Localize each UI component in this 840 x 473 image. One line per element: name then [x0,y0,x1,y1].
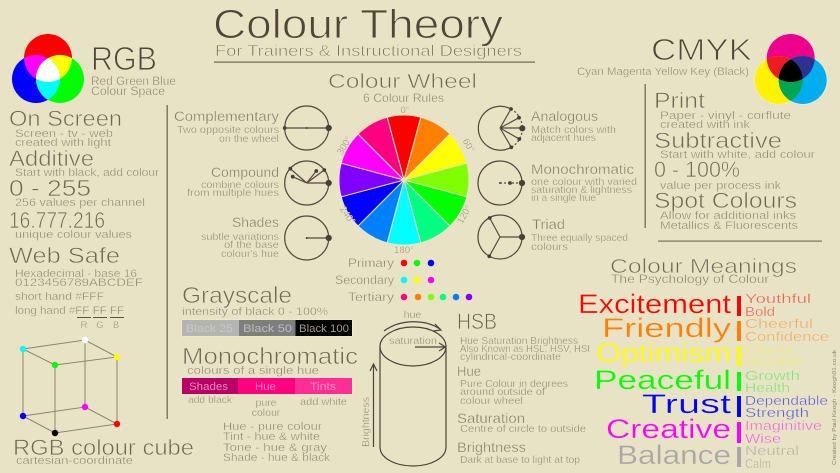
meaning: trust: Strength [745,405,809,420]
credit: Created by Paul Keogh - Keogh01.co.uk [832,350,838,465]
meaning: optimism [596,338,805,369]
rule: complementary [174,106,332,150]
meaning: balance: Calm [745,456,771,471]
panel: monochromatic [182,343,358,419]
panel: RGB facts: 0 - 255 [9,175,91,201]
panel: RGB facts: Screen - tv - web [15,128,113,140]
rule: analogous: Analogous [531,109,598,124]
text block: HSB: Brightness [457,439,526,455]
meaning: trust [642,389,828,420]
wheel degree labels: 300° [335,134,355,157]
heading: colour meanings: The Psychology of Colour [611,272,769,286]
legend: primary, secondary, tertiary: Secondary [335,275,394,287]
panel: web safe: B [113,320,119,331]
panel: web safe: Hexadecimal - base 16 [15,268,137,280]
heading: colour wheel [328,71,477,105]
divider: right column [644,84,646,228]
panel: CMYK facts: created with ink [660,119,751,131]
meaning: peaceful [594,365,800,395]
text block: HSB: cylindrical-coordinate [460,351,561,363]
panel: CMYK facts: Paper - vinyl - corflute [660,110,791,122]
heading: RGB colour cube: cartesian-coordinate [16,455,133,467]
meaning: creative [606,414,822,446]
panel: monochromatic: add white [300,396,347,408]
text block: HSB: Also Known as HSL, HSV, HSI [460,343,590,355]
rule: compound [187,161,332,205]
heading: RGB: Red Green Blue [91,76,176,88]
rule: monochromatic: one colour with varied [531,176,637,188]
text block: HSB: Centre of circle to outside [460,423,586,435]
heading: CMYK [577,32,752,78]
rule: shades: subtle variations [201,231,279,243]
chart: HSB cylinder: hue [404,309,421,321]
panel: web safe: short hand #FFF [15,291,104,303]
text block: hue definitions: Tone - hue & gray [223,442,328,454]
panel: RGB facts: 256 values per channel [15,197,145,209]
rule: triad [478,215,628,259]
rule: shades [201,215,332,260]
panel: CMYK facts: 0 - 100% [654,157,740,182]
rule: analogous: Match colors with [531,124,616,136]
rule: compound: combine colours [201,179,279,191]
wheel degree labels: 180° [394,245,414,256]
text block: hue definitions: Tint - hue & white [223,431,320,443]
rule: analogous: adjacent hues [531,132,596,144]
text block: HSB: HSB [457,309,497,334]
text block: hue definitions: Shade - hue & black [223,452,331,464]
text block: HSB: around outside of [460,386,545,398]
legend: primary, secondary, tertiary: Primary [348,258,394,270]
rule: complementary: Two opposite colours [177,124,279,136]
divider: left column [166,105,168,419]
panel: monochromatic: colour [252,407,281,419]
wheel degree labels [335,105,477,256]
meaning: balance: Balance [617,440,731,470]
panel: web safe: 0123456789ABCDEF [15,277,143,289]
heading: colour wheel: 6 Colour Rules [363,91,444,105]
heading: colour meanings [610,256,797,286]
wheel degree labels: 120° [455,203,475,226]
rule: complementary: Complementary [174,109,279,124]
rule: triad: Three equally spaced [531,232,628,244]
meaning: excitement: Bold [745,304,775,319]
legend: primary, secondary, tertiary [335,258,472,304]
text block: HSB: Saturation [457,410,525,426]
panel: web safe [9,243,143,331]
panel: monochromatic: colours of a single hue [187,365,319,377]
meaning: creative: Wise [745,431,781,446]
rule: analogous [478,106,616,150]
panel: CMYK facts: Spot Colours [654,188,797,213]
panel: CMYK facts: Metallics & Fluorescents [660,220,799,232]
panel: web safe: long hand #FF FF FF [15,305,124,317]
heading: colour wheel: Colour Wheel [328,71,477,93]
meaning: friendly [602,313,829,344]
panel: RGB facts [9,106,159,241]
text block: hue definitions [223,421,331,464]
heading: colour meanings: Colour Meanings [610,256,797,278]
meaning: creative: Imaginitive [745,418,822,433]
panel: web safe: G [96,320,104,331]
meaning: peaceful: Growth [745,368,800,383]
panel: RGB facts: unique colour values [15,229,133,241]
wheel degree labels: 240° [337,204,357,227]
rule: shades: of the base [224,239,279,251]
panel: monochromatic: Hue [255,381,276,393]
chart: colour wheel [339,115,469,245]
heading: RGB [91,40,176,98]
rule: monochromatic: Monochromatic [531,162,634,177]
legend: primary, secondary, tertiary: Tertiary [348,292,394,304]
panel: CMYK facts: value per process ink [660,180,782,192]
rule: triad: colours [531,241,568,253]
panel: monochromatic: add black [188,394,233,406]
panel: monochromatic: Tints [310,381,337,393]
wheel degree labels: 60° [460,137,477,155]
meaning: peaceful: Health [745,380,790,395]
chart: HSB cylinder: Brightness [360,397,372,447]
meaning: excitement: Excitement [578,289,732,319]
meaning: balance: Neutral [745,443,799,458]
meaning: excitement: Youthful [745,291,811,306]
meaning: friendly: Cheerful [745,316,813,331]
meaning: balance [617,440,799,471]
text block: HSB: Pure Colour in degrees [460,378,568,390]
panel: CMYK facts: Subtractive [654,128,782,153]
panel: RGB facts: created with light [15,137,111,149]
panel: grayscale: Black 100 [299,323,349,335]
icon: RGB additive circles [12,34,84,103]
title: For Trainers & Instructional Designers [215,43,522,60]
text block: HSB: Hue Saturation Brightness [460,335,578,347]
rule: shades: Shades [232,215,279,230]
panel: CMYK facts: Start with white, add colour [660,149,815,161]
heading: RGB colour cube: RGB colour cube [13,435,194,460]
title: Colour Theory [213,1,504,47]
panel: CMYK facts: Allow for additional inks [660,210,797,222]
chart: HSB cylinder: saturation [389,335,437,347]
meaning: trust: Trust [642,389,732,419]
rule: monochromatic: in a single hue [531,192,596,204]
heading: RGB: Colour Space [91,86,165,98]
meaning: friendly: Friendly [602,313,732,343]
panel: grayscale [182,282,352,336]
rule: compound: from multiple hues [187,187,279,199]
panel: RGB facts: Additive [9,146,94,171]
panel: monochromatic: Monochromatic [182,343,358,369]
panel: grayscale: Grayscale [182,282,292,308]
icon: CMYK subtractive circles [754,34,827,104]
meaning: optimism: Optimism [596,338,731,368]
panel: monochromatic: pure [255,397,277,409]
meaning: optimism: Clarity [745,342,794,357]
rule: complementary: on the wheel [219,133,279,145]
rule: triad: Triad [532,217,565,232]
panel: grayscale: Black 50 [243,323,292,335]
meaning: trust: Dependable [745,393,828,408]
panel: RGB facts: 16.777.216 [9,207,105,233]
panel: RGB facts: On Screen [9,106,122,131]
chart: RGB colour cube [20,337,120,436]
meaning: optimism: Warmth [745,354,805,369]
rule: shades: colour's hue [221,248,279,260]
panel: grayscale: Black 25 [186,323,233,335]
meaning: friendly: Confidence [745,329,829,344]
rule: monochromatic: saturation & lightness [531,184,632,196]
panel: CMYK facts [654,88,822,242]
text block: hue definitions: Hue - pure colour [223,421,322,433]
rule: compound: Compound [211,165,279,180]
panel: web safe: R [81,320,88,331]
text block: HSB: Hue [457,363,481,379]
meaning: excitement [578,289,811,319]
meaning: peaceful: Peaceful [594,365,731,395]
heading: CMYK: CMYK [651,32,752,67]
meaning: creative: Creative [606,414,731,444]
text block: HSB: Dark at base to light at top [460,454,580,466]
wheel degree labels: 0° [400,105,410,116]
chart: HSB cylinder [360,309,446,466]
heading: CMYK: Cyan Magenta Yellow Key (Black) [577,66,749,78]
panel: grayscale: intensity of black 0 - 100% [182,306,328,318]
panel: CMYK facts: Print [654,88,705,113]
text block: HSB: colour wheel [460,395,523,407]
text block: HSB [457,309,590,466]
heading: RGB: RGB [91,40,157,77]
panel: monochromatic: Shades [189,381,229,393]
title [213,1,535,63]
panel: web safe: Web Safe [9,243,120,268]
rule: monochromatic [478,161,637,205]
panel: RGB facts: Start with black, add colour [15,167,159,179]
